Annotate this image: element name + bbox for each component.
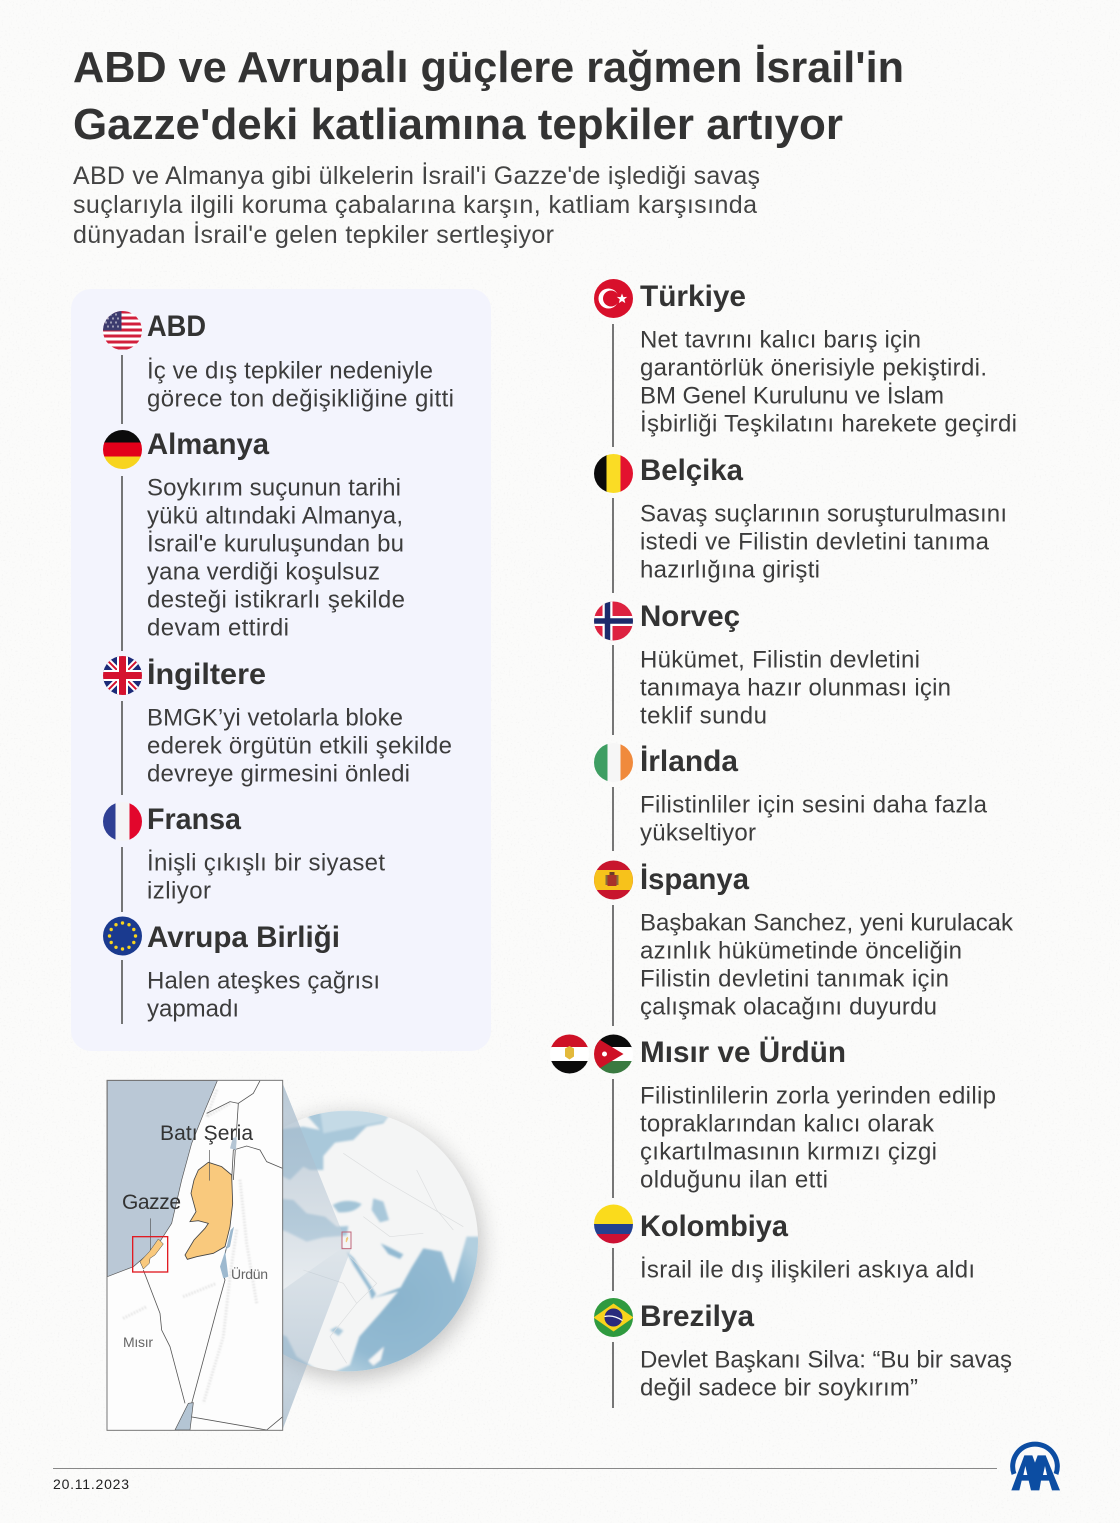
- subtitle: ABD ve Almanya gibi ülkelerin İsrail'i Gazze'de işlediği savaş: [73, 161, 760, 190]
- text block: [640, 500, 1007, 584]
- text block: desteği istikrarlı şekilde: [147, 586, 405, 614]
- location marker: [342, 1232, 351, 1249]
- heading: Mısır ve Ürdün: [640, 1036, 846, 1069]
- icon: Norwegian flag: [594, 601, 634, 641]
- text block: [640, 910, 1014, 1020]
- text block: [147, 704, 452, 788]
- icon: German flag: [102, 430, 142, 470]
- text block: [147, 358, 454, 412]
- heading: Norveç: [640, 600, 740, 633]
- entry: İspanya: [594, 860, 1014, 1026]
- text block: çalışmak olacağını duyurdu: [640, 994, 937, 1020]
- text block: [147, 968, 380, 1022]
- borders: [143, 1081, 283, 1430]
- land borders: [303, 1153, 463, 1363]
- text block: yükü altındaki Almanya,: [147, 502, 403, 530]
- text block: Filistinliler için sesini daha fazla: [640, 792, 988, 818]
- arctic water: [282, 1114, 388, 1180]
- entry: İngiltere: [102, 656, 452, 795]
- icon: Jordanian flag: [594, 1034, 634, 1075]
- persian gulf: [381, 1243, 403, 1259]
- text block: ederek örgütün etkili şekilde: [147, 732, 452, 760]
- map labels: Batı Şeria: [160, 1122, 253, 1145]
- text block: [640, 1082, 996, 1194]
- text block: Devlet Başkanı Silva: “Bu bir savaş: [640, 1346, 1012, 1374]
- text block: yana verdiği koşulsuz: [147, 558, 380, 586]
- text block: hazırlığına girişti: [640, 556, 820, 584]
- text block: izliyor: [147, 878, 211, 904]
- text block: Halen ateşkes çağrısı: [147, 968, 380, 994]
- icon: UK flag: [102, 656, 142, 696]
- entry: Türkiye: [594, 278, 1017, 447]
- icon: French flag: [102, 802, 142, 842]
- entry: Brezilya: [594, 1298, 1012, 1408]
- map labels: Ürdün: [231, 1265, 268, 1282]
- entry: Mısır ve Ürdün: [550, 1034, 996, 1198]
- entry: Belçika: [594, 454, 1007, 593]
- text block: [640, 326, 1017, 438]
- text block: Filistinlilerin zorla yerinden edilip: [640, 1082, 996, 1110]
- text block: İsrail'e kuruluşundan bu: [147, 530, 404, 558]
- projection cone: [283, 1083, 351, 1429]
- text block: Filistin devletini tanımak için: [640, 966, 949, 992]
- heading: ABD: [147, 310, 206, 343]
- subtitle: suçlarıyla ilgili koruma çabalarına karşın, katliam karşısında: [73, 191, 757, 219]
- heading: İspanya: [640, 863, 749, 896]
- text block: istedi ve Filistin devletini tanıma: [640, 528, 990, 556]
- text block: [640, 1346, 1012, 1402]
- heading: Kolombiya: [640, 1210, 788, 1243]
- west bank: [185, 1162, 233, 1259]
- text block: devreye girmesini önledi: [147, 760, 410, 788]
- text block: Savaş suçlarının soruşturulmasını: [640, 500, 1007, 528]
- text block: topraklarından kalıcı olarak: [640, 1110, 935, 1138]
- icon: Spanish flag: [594, 860, 634, 900]
- heading: İngiltere: [147, 658, 266, 691]
- map labels: Mısır: [123, 1334, 153, 1350]
- entry: Kolombiya: [594, 1204, 975, 1291]
- title: [73, 43, 904, 149]
- text block: [147, 474, 405, 642]
- entry: Fransa: [102, 802, 385, 912]
- entry: İrlanda: [594, 742, 988, 851]
- text block: çıkartılmasının kırmızı çizgi: [640, 1138, 937, 1166]
- text block: İnişli çıkışlı bir siyaset: [147, 850, 385, 876]
- heading: Fransa: [147, 803, 241, 836]
- indian ocean: [323, 1237, 482, 1377]
- text block: görece ton değişikliğine gitti: [147, 386, 454, 412]
- icon: Colombian flag: [594, 1204, 634, 1244]
- text block: İç ve dış tepkiler nedeniyle: [147, 358, 433, 384]
- icon: EU flag: [102, 916, 142, 956]
- text block: Hükümet, Filistin devletini: [640, 646, 920, 674]
- globe: [282, 1110, 478, 1372]
- text block: İşbirliği Teşkilatını harekete geçirdi: [640, 410, 1017, 438]
- entry: ABD: [102, 310, 454, 424]
- text block: İsrail ile dış ilişkileri askıya aldı: [640, 1256, 975, 1284]
- text block: BMGK’yi vetolarla bloke: [147, 704, 403, 732]
- gaza marker: [133, 1237, 168, 1272]
- logo: AA: [1011, 1444, 1060, 1490]
- title: ABD ve Avrupalı güçlere rağmen İsrail'in: [73, 43, 904, 92]
- text block: yapmadı: [147, 996, 239, 1022]
- icon: Egyptian flag: [551, 1034, 588, 1074]
- text block: Net tavrını kalıcı barış için: [640, 326, 921, 354]
- black sea: [333, 1201, 362, 1212]
- subtitle: dünyadan İsrail'e gelen tepkiler sertleşiyor: [73, 220, 554, 249]
- heading: Türkiye: [640, 280, 746, 313]
- sea: [107, 1081, 217, 1277]
- heading: Belçika: [640, 454, 743, 487]
- entry: Avrupa Birliği: [102, 916, 380, 1024]
- icon: Turkish flag: [594, 278, 634, 318]
- red sea: [347, 1252, 376, 1299]
- panel: left countries: [71, 289, 491, 1051]
- heading: İrlanda: [640, 745, 738, 778]
- heading: Avrupa Birliği: [147, 921, 340, 954]
- title: Gazze'deki katliamına tepkiler artıyor: [73, 100, 843, 149]
- date: 20.11.2023: [53, 1476, 129, 1492]
- caspian: [372, 1198, 389, 1222]
- globe map: [107, 1080, 483, 1430]
- icon: US flag: [102, 310, 142, 350]
- text block: yükseltiyor: [640, 820, 756, 846]
- text block: teklif sundu: [640, 702, 767, 730]
- entry: Almanya: [102, 428, 405, 651]
- icon: Brazilian flag: [594, 1298, 634, 1338]
- icon: Belgian flag: [594, 454, 634, 494]
- text block: [640, 646, 951, 730]
- mediterranean: [270, 1198, 348, 1242]
- text block: azınlık hükümetinde önceliğin: [640, 938, 962, 964]
- map labels: Gazze: [122, 1191, 181, 1214]
- text block: BM Genel Kurulunu ve İslam: [640, 382, 944, 410]
- text block: devam ettirdi: [147, 614, 289, 642]
- text block: olduğunu ilan etti: [640, 1166, 828, 1194]
- text block: değil sadece bir soykırım”: [640, 1374, 918, 1402]
- text block: tanımaya hazır olunması için: [640, 674, 951, 702]
- map labels: [122, 1122, 268, 1350]
- icon: Irish flag: [594, 742, 634, 782]
- text block: garantörlük önerisiyle pekiştirdi.: [640, 354, 987, 382]
- text block: [147, 850, 385, 904]
- footer line: [53, 1468, 997, 1470]
- text block: Başbakan Sanchez, yeni kurulacak: [640, 910, 1014, 936]
- entry: Norveç: [594, 600, 951, 735]
- text block: Soykırım suçunun tarihi: [147, 474, 401, 502]
- gaza: [140, 1239, 163, 1269]
- text block: [640, 792, 988, 846]
- inset map: [107, 1081, 283, 1430]
- heading: Brezilya: [640, 1300, 754, 1333]
- dead sea and gulf: [220, 1227, 234, 1278]
- subtitle: [73, 161, 760, 249]
- heading: Almanya: [147, 428, 269, 461]
- terrain: [123, 1090, 257, 1403]
